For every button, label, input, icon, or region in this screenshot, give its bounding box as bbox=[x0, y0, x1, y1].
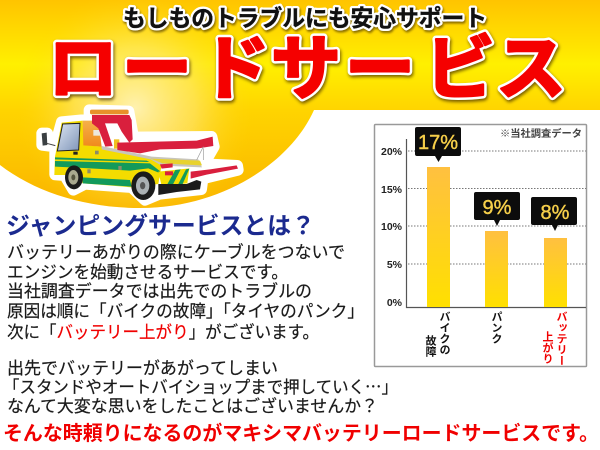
icon: tow truck bbox=[42, 110, 238, 200]
title: ロードサービス bbox=[48, 13, 566, 114]
text block: explanation: 原因は順に「バイクの故障」「タイヤのパンク」 bbox=[7, 297, 364, 322]
text block: question: なんて大変な思いをしたことはございませんか？ bbox=[7, 392, 378, 417]
y axis tick labels: 10% bbox=[381, 221, 403, 233]
subtitle: もしものトラブルにも安心サポート bbox=[123, 0, 487, 33]
x axis labels: バイクの bbox=[438, 311, 450, 355]
y axis tick labels: 0% bbox=[387, 297, 403, 309]
chart frame bbox=[374, 124, 586, 366]
truck white halo bbox=[42, 110, 238, 200]
x axis labels: バッテリー bbox=[555, 311, 568, 366]
axes bbox=[406, 139, 586, 308]
text block: explanation: エンジンを始動させるサービスです。 bbox=[7, 258, 288, 283]
callout: 17% bbox=[415, 127, 461, 162]
tow crane bbox=[90, 110, 238, 179]
x axis labels: 故障 bbox=[424, 334, 436, 358]
heading: jumping service: ジャンピングサービスとは？ bbox=[6, 212, 315, 240]
x axis labels: パンク bbox=[490, 311, 502, 344]
text block: question bbox=[3, 354, 398, 417]
bar: バイクの故障 17% bbox=[427, 167, 450, 307]
panel: bar chart bbox=[374, 124, 586, 366]
truck body bbox=[42, 121, 202, 187]
callout: 17%: 17% bbox=[418, 132, 458, 154]
title: ロードサービス bbox=[48, 13, 566, 114]
callout: 9% bbox=[474, 192, 520, 226]
callout: 8% bbox=[531, 197, 577, 231]
callout: 8%: 8% bbox=[541, 202, 570, 224]
rear wheel bbox=[131, 171, 201, 200]
text block: explanation: 当社調査データでは出先でのトラブルの bbox=[7, 277, 312, 302]
y axis tick labels: 15% bbox=[381, 184, 403, 196]
text block: question: 「スタンドやオートバイショップまで押していく…」 bbox=[3, 373, 398, 398]
callout: 9%: 9% bbox=[483, 197, 512, 219]
text block: explanation: バッテリーあがりの際にケーブルをつないで bbox=[7, 238, 345, 263]
yellow header background with curved bottom bbox=[0, 0, 600, 208]
y axis tick labels: 5% bbox=[387, 259, 403, 271]
bar: バッテリー上がり 8% bbox=[544, 238, 567, 307]
chart source note: ※当社調査データ bbox=[500, 127, 582, 140]
subtitle: もしものトラブルにも安心サポート bbox=[123, 0, 487, 33]
front wheel bbox=[65, 165, 83, 189]
x axis labels: 上がり bbox=[541, 331, 554, 364]
text block: question: 出先でバッテリーがあがってしまい bbox=[7, 354, 278, 379]
text block: explanation: 次に「バッテリー上がり」がございます。 bbox=[7, 318, 319, 343]
bar: パンク 9% bbox=[485, 231, 508, 307]
closing red statement: そんな時頼りになるのがマキシマバッテリーロードサービスです。 bbox=[3, 421, 599, 445]
text block: explanation bbox=[7, 238, 364, 343]
y axis tick labels: 20% bbox=[381, 146, 403, 158]
x axis labels bbox=[424, 311, 568, 366]
y axis tick labels bbox=[381, 146, 403, 309]
